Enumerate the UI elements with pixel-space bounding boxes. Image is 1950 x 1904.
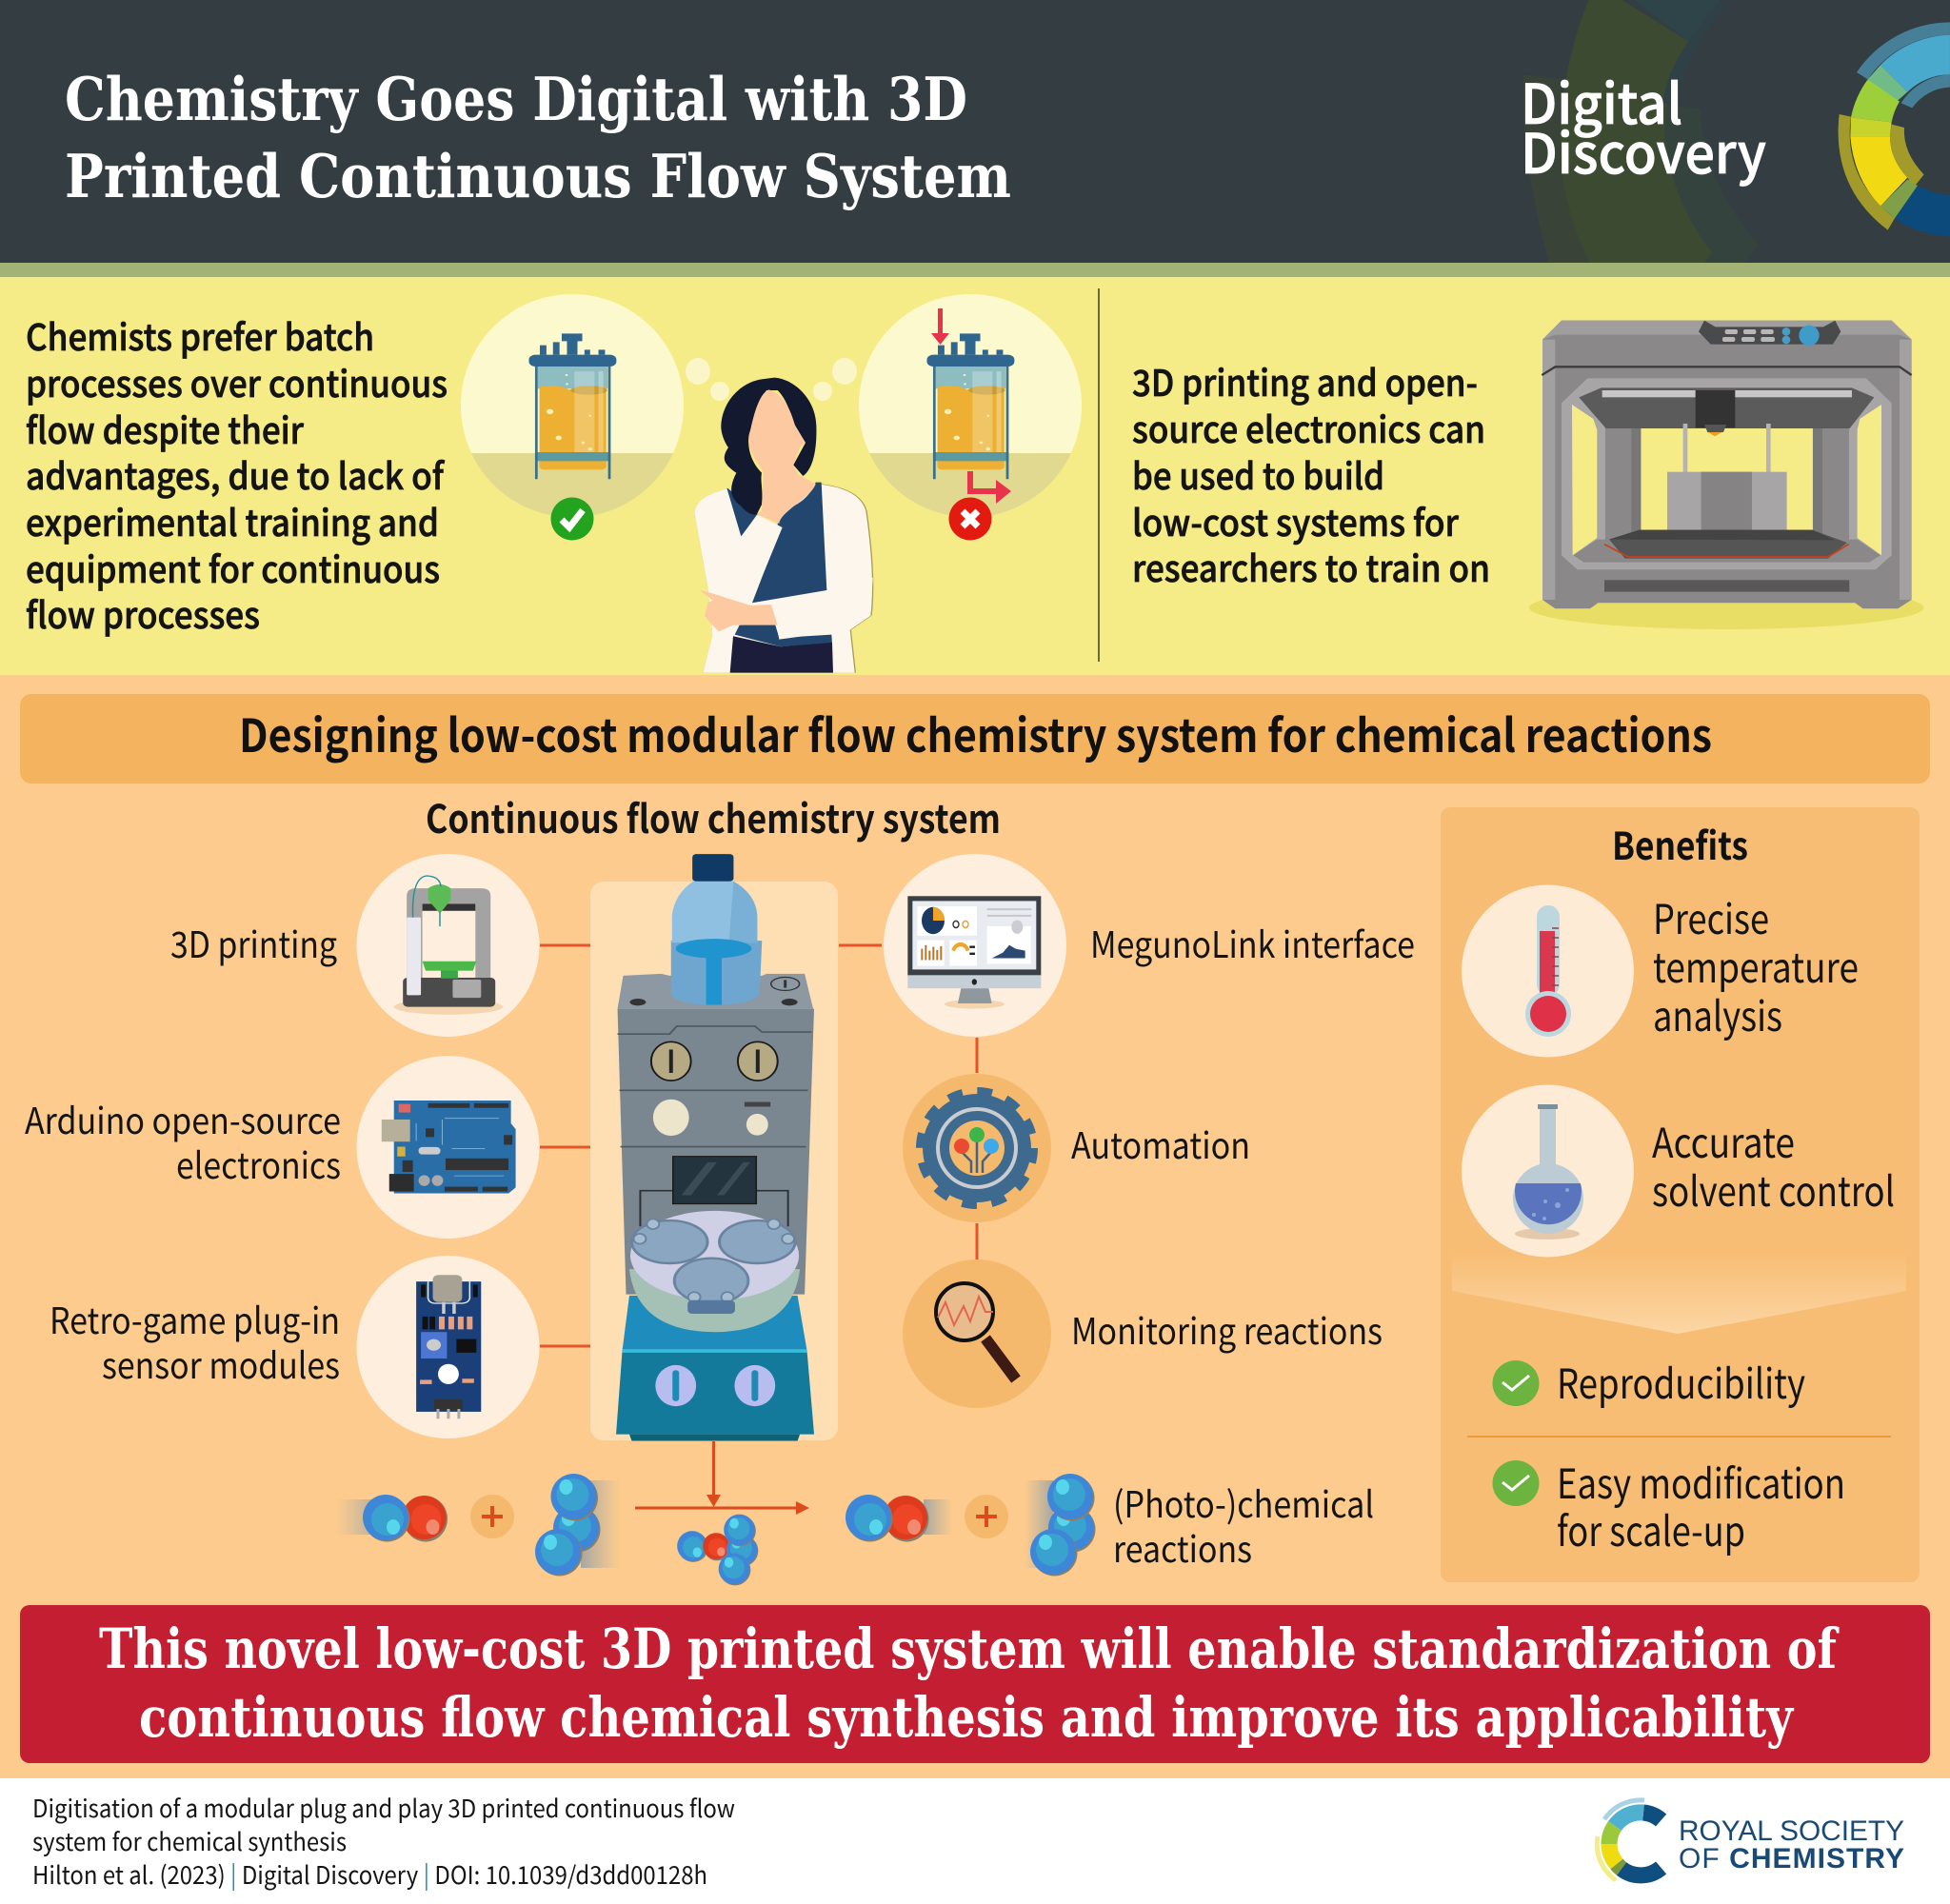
intro text: flow despite their	[26, 402, 304, 454]
intro text: processes over continuous	[26, 355, 448, 407]
journal name: Discovery	[1521, 109, 1766, 189]
icon: 3D printer in circle	[356, 854, 539, 1037]
title	[65, 64, 1011, 211]
footer citation: Hilton et al. (2023) | Digital Discovery | DOI: 10.1039/d3dd00128h	[32, 1856, 707, 1892]
reaction scheme	[337, 1441, 1374, 1585]
label: Arduino open-source electronics	[25, 1092, 341, 1189]
text: accurate solvent control: solvent control	[1652, 1160, 1895, 1219]
icon: automation gear	[903, 1074, 1051, 1222]
3D printing explanation text: 3D printing and open-	[1132, 354, 1478, 407]
chevron arrow	[1452, 1253, 1906, 1334]
footer citation	[32, 1790, 735, 1892]
title: Printed Continuous Flow System	[65, 141, 1011, 211]
footer citation: Digitisation of a modular plug and play 3D printed continuous flow	[32, 1790, 735, 1825]
label: Arduino open-source electronics: electronics	[176, 1137, 341, 1189]
3D printing explanation text: researchers to train on	[1132, 540, 1490, 592]
product cluster	[1025, 1474, 1095, 1577]
icon: magnifier monitoring	[903, 1259, 1051, 1408]
illustration: 3D printer	[1529, 321, 1924, 629]
title: Chemistry Goes Digital with 3D	[65, 64, 967, 134]
label: Retro-game sensor modules	[50, 1292, 340, 1389]
section banner: Designing low-cost modular flow chemistry system for chemical reactions	[239, 699, 1712, 765]
logo: Royal Society of Chemistry: ROYAL SOCIETY	[1679, 1815, 1904, 1847]
subheading: Continuous flow chemistry system	[426, 787, 1001, 844]
conclusion banner	[20, 1605, 1930, 1763]
intro text: Chemists prefer batch	[26, 308, 374, 361]
intermediate complex	[677, 1515, 758, 1585]
3D printing explanation text: be used to build	[1132, 447, 1384, 500]
benefits heading: Benefits	[1612, 816, 1748, 871]
icon: round-bottom flask	[1462, 1085, 1634, 1257]
label: Monitoring reactions: Monitoring reactions	[1071, 1302, 1383, 1355]
centre backdrop	[590, 882, 838, 1440]
product pair	[846, 1495, 952, 1542]
reaction arrows	[635, 1441, 809, 1515]
reagent cluster	[535, 1474, 619, 1577]
3D printing explanation text	[1132, 354, 1490, 592]
reagent pair	[337, 1495, 448, 1542]
icon: Arduino board in circle	[356, 1056, 539, 1239]
label: photochemical reactions: (Photo-)chemical	[1113, 1476, 1374, 1528]
label: MegunoLink interface: MegunoLink interface	[1090, 916, 1415, 968]
icon: sensor module in circle	[356, 1256, 539, 1438]
text: easy modification: for scale-up	[1557, 1499, 1745, 1558]
label: Arduino open-source electronics: Arduino open-source	[25, 1092, 341, 1144]
intro text: flow processes	[26, 586, 260, 639]
icon: thermometer	[1462, 885, 1634, 1057]
intro text	[26, 308, 448, 639]
logo: Royal Society of Chemistry: OF CHEMISTRY	[1679, 1843, 1904, 1874]
connector lines	[540, 945, 977, 1346]
label: photochemical reactions: reactions	[1113, 1520, 1252, 1573]
thought dots	[686, 358, 857, 401]
label: Retro-game sensor modules: sensor modules	[102, 1337, 340, 1389]
illustration: flow chemistry device	[616, 854, 814, 1441]
3D printing explanation text: low-cost systems for	[1132, 494, 1459, 546]
intro text: equipment for continuous	[26, 541, 440, 593]
intro text: experimental training and	[26, 494, 439, 546]
panel: batch vs continuous intro	[0, 277, 1950, 675]
logo: Royal Society of Chemistry	[1597, 1800, 1904, 1880]
thought bubble: poor flow vessel	[859, 294, 1082, 541]
text: precise temperature analysis: analysis	[1653, 984, 1782, 1043]
icon: check scale-up	[1493, 1460, 1539, 1506]
intro text: advantages, due to lack of	[26, 447, 446, 500]
panel: modular system design	[0, 675, 1950, 1778]
footer citation: system for chemical synthesis	[32, 1823, 347, 1858]
label: Automation: Automation	[1071, 1117, 1250, 1169]
text: precise temperature analysis	[1653, 887, 1859, 1043]
journal name: Digital	[1521, 60, 1682, 140]
3D printing explanation text: source electronics can	[1132, 401, 1485, 453]
text: accurate solvent control	[1652, 1111, 1895, 1219]
icon: check reproducibility	[1493, 1360, 1539, 1406]
section banner	[20, 694, 1930, 783]
thought bubble: good batch vessel	[461, 294, 684, 541]
text: accurate solvent control: Accurate	[1652, 1111, 1795, 1170]
text: easy modification	[1557, 1452, 1845, 1558]
journal logo ring	[1839, 22, 1950, 236]
label: Retro-game sensor modules: Retro-game plug-in	[50, 1292, 340, 1344]
text: precise temperature analysis: Precise	[1653, 887, 1769, 946]
panel: benefits	[1441, 807, 1920, 1582]
text: easy modification: Easy modification	[1557, 1452, 1845, 1511]
icon: dashboard monitor in circle	[884, 854, 1066, 1037]
label: photochemical reactions	[1113, 1476, 1374, 1573]
plus sign	[470, 1495, 514, 1538]
text: precise temperature analysis: temperature	[1653, 936, 1859, 995]
plus sign	[965, 1495, 1008, 1538]
illustration: thinking chemist	[694, 378, 873, 673]
header band	[0, 0, 1950, 277]
label: 3D printing: 3D printing	[170, 916, 337, 968]
journal name	[1521, 60, 1766, 189]
text: reproducibility: Reproducibility	[1557, 1352, 1805, 1411]
